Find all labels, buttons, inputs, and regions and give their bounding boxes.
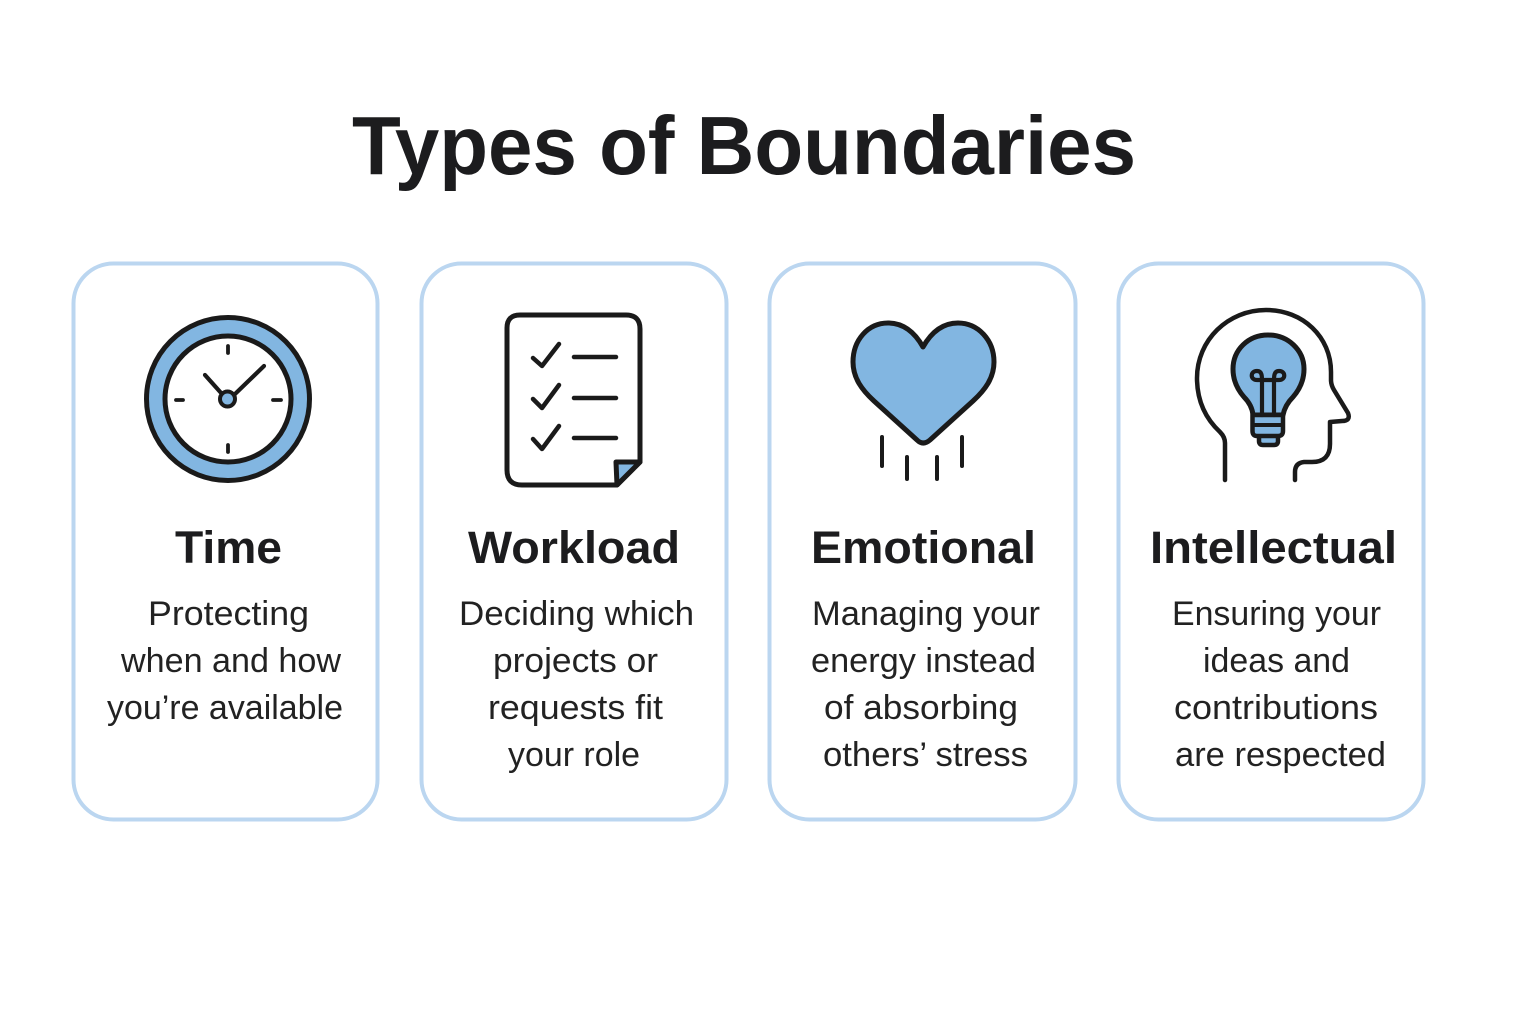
description: Emotional [811,595,1040,774]
title: Types of Boundaries [352,99,1136,192]
description: Intellectual: ideas and [1203,642,1350,680]
description: Workload [459,595,694,774]
heading: Time: Time [175,522,282,573]
description: Workload: your role [508,736,640,774]
description: Emotional: of absorbing [824,689,1018,727]
panel: Time [74,264,378,820]
description: Intellectual: Ensuring your [1172,595,1381,633]
description: Workload: requests fit [488,689,664,727]
panel: Workload [422,264,726,820]
panel: Intellectual [1118,264,1424,820]
description: Intellectual: are respected [1175,736,1386,774]
description: Time: Protecting [148,595,309,633]
icon: heart with drips [853,323,994,479]
description: Time [107,595,343,727]
icon: head with light bulb [1197,310,1349,480]
description: Emotional: Managing your [812,595,1040,633]
description: Time: when and how [120,642,341,680]
description: Emotional: energy instead [811,642,1036,680]
icon: clock [146,318,310,480]
description: Intellectual: contributions [1174,689,1378,727]
description: Time: you’re available [107,689,343,727]
description: Emotional: others’ stress [823,736,1028,774]
description: Workload: Deciding which [459,595,694,633]
heading: Intellectual: Intellectual [1150,522,1397,573]
description: Workload: projects or [493,642,658,680]
description: Intellectual [1172,595,1386,774]
panel: Emotional [770,264,1076,820]
heading: Emotional: Emotional [811,522,1036,573]
heading: Workload: Workload [468,522,680,573]
icon: checklist document [507,315,640,485]
